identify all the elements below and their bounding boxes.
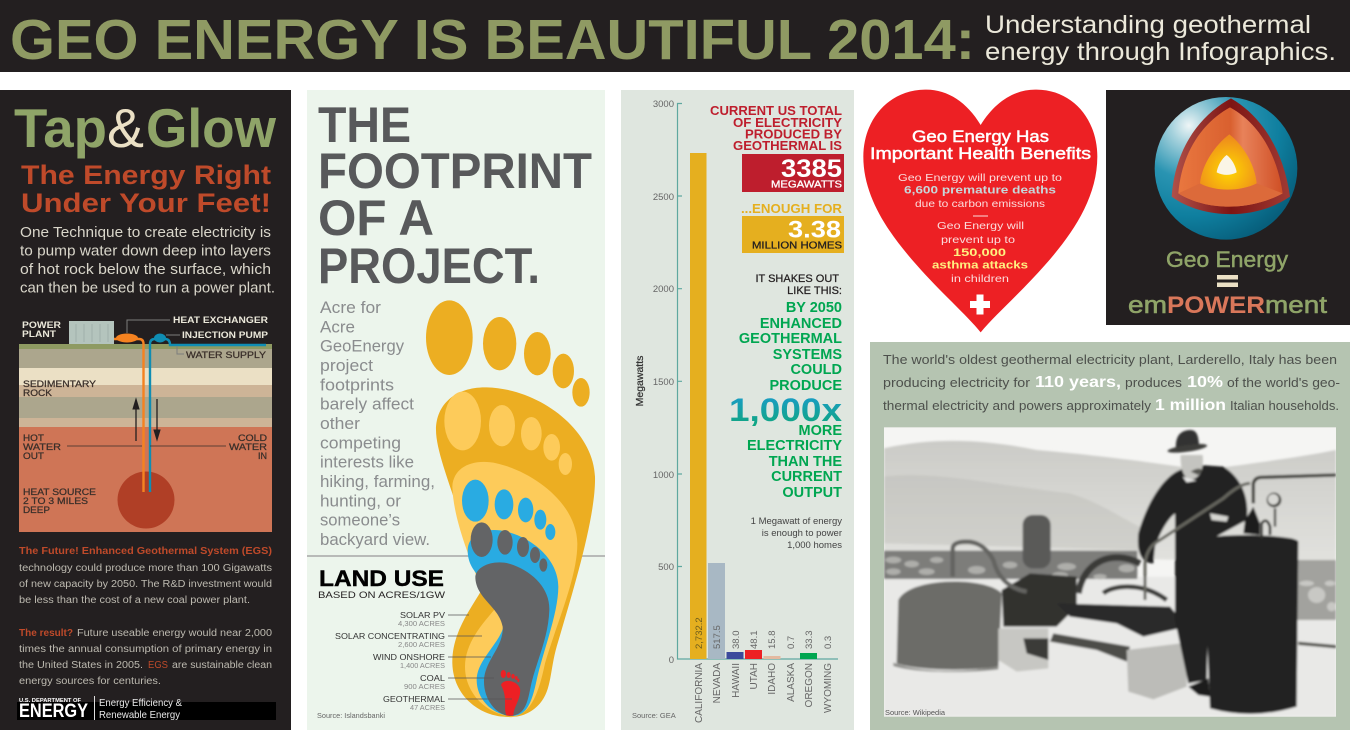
text: by 2050: GEOTHERMAL <box>739 331 842 347</box>
note <box>751 516 842 551</box>
logo: Tap&Glow: Glow <box>146 97 276 159</box>
diagram: geothermal system: DEEP <box>23 505 50 515</box>
text: Larderello: of the world's geo- <box>1227 376 1340 390</box>
bar values: 517.5 <box>712 625 723 649</box>
diagram: geothermal system: HEAT SOURCE <box>23 487 96 497</box>
intro text: to pump water down deep into layers <box>20 244 271 260</box>
intro text: One Technique to create electricity is <box>20 225 271 241</box>
panel: health heart <box>863 90 1097 332</box>
bar chart: megawatts by state <box>634 99 838 723</box>
legend: land use: 1,400 ACRES <box>400 663 445 670</box>
icon: earth cutaway <box>1155 97 1297 240</box>
y axis labels <box>653 99 674 666</box>
note: 1,000 homes <box>787 540 842 551</box>
state labels: HAWAII <box>731 663 742 698</box>
text: future EGS: The Future! Enhanced Geothermal System (EGS) <box>19 546 272 557</box>
text: by 2050: 1,000x <box>729 392 842 428</box>
photo: Larderello geothermal machine <box>884 427 1336 717</box>
diagram: geothermal system: ROCK <box>23 388 52 398</box>
heading: OF A <box>318 190 434 246</box>
icon: heart <box>863 90 1097 332</box>
panel: Tap & Glow <box>0 90 291 730</box>
text: current total: GEOTHERMAL IS <box>733 138 842 153</box>
text: empowerment: em <box>1128 292 1167 319</box>
text: by 2050 <box>729 300 842 501</box>
body text: backyard view. <box>320 531 430 549</box>
heading: The Energy Right <box>21 160 271 190</box>
text: the result: the United States in 2005. <box>19 660 143 671</box>
diagram labels <box>22 315 269 340</box>
intro text: can then be used to run a power plant. <box>20 280 275 296</box>
text: Larderello: 1 million <box>1155 397 1226 414</box>
body text: someone’s <box>320 512 400 530</box>
callout: 3385 megawatts: MEGAWATTS <box>771 178 842 190</box>
heading: Important Health Benefits <box>870 144 1091 163</box>
diagram labels: HEAT EXCHANGER <box>173 315 269 325</box>
state labels: ALASKA <box>786 663 797 702</box>
y axis labels: 1500 <box>653 377 674 388</box>
text: by 2050: SYSTEMS <box>773 347 842 363</box>
logo: Tap&Glow: Tap <box>14 97 107 159</box>
logo: US Department of Energy: ENERGY <box>19 701 88 722</box>
title: GEO ENERGY IS BEAUTIFUL 2014: <box>10 8 975 72</box>
logo: US Department of Energy: Energy Efficiency & <box>99 697 182 709</box>
logo: US Department of Energy: Renewable Energy <box>99 709 181 721</box>
bar values: 0.7 <box>786 636 797 649</box>
heading: land use <box>318 566 445 601</box>
text: by 2050: CURRENT <box>771 469 842 485</box>
body text: hunting, or <box>320 492 402 510</box>
text: it shakes out: LIKE THIS: <box>787 285 842 297</box>
chart: nested footprints <box>426 300 595 717</box>
legend: land use: GEOTHERMAL <box>383 694 445 704</box>
body text: Acre for <box>320 299 382 317</box>
body text: 6,600 premature deaths <box>904 184 1056 196</box>
text: Larderello: 110 years, <box>1035 374 1121 391</box>
heading: land use: BASED ON ACRES/1GW <box>318 590 445 601</box>
y axis labels: 500 <box>658 562 674 573</box>
diagram: geothermal system: 2 TO 3 MILES <box>23 496 88 506</box>
body text: hiking, farming, <box>320 473 435 491</box>
diagram: geothermal system: COLD <box>238 433 268 443</box>
text: current total <box>710 103 842 153</box>
state labels <box>694 663 834 723</box>
leaders <box>127 320 184 354</box>
y axis labels: 3000 <box>653 99 674 110</box>
text: the result: EGS <box>148 660 168 671</box>
footprint: solar PV <box>426 300 595 717</box>
text: Larderello: producing electricity for <box>883 376 1030 390</box>
body text: interests like <box>320 454 414 472</box>
text: the result: times the annual consumption of primary energy in <box>19 644 272 655</box>
text: by 2050: BY 2050 <box>786 300 842 316</box>
pipes <box>114 339 266 492</box>
logo: Tap&Glow <box>14 97 276 159</box>
heading <box>318 97 592 294</box>
state labels: OREGON <box>804 663 815 707</box>
body text: Geo Energy will <box>937 220 1024 232</box>
state labels: IDAHO <box>767 663 778 695</box>
text: empowerment <box>1128 292 1327 319</box>
text: by 2050: COULD <box>790 362 842 378</box>
diagram labels: POWER <box>22 320 62 330</box>
text: it shakes out <box>755 273 842 297</box>
state labels: CALIFORNIA <box>694 663 705 723</box>
text: geo energy: Geo Energy <box>1166 247 1288 272</box>
text: Larderello: produces <box>1125 376 1182 390</box>
note: is enough to power <box>762 528 842 539</box>
text: future EGS: be less than the cost of a new coal power plant. <box>19 595 250 606</box>
note: 1 Megawatt of energy <box>751 516 842 527</box>
header banner <box>0 0 1350 72</box>
text: the result: energy sources for centuries. <box>19 676 161 687</box>
heading: Under Your Feet! <box>21 188 271 218</box>
diagram: geothermal system: IN <box>258 451 267 461</box>
text: by 2050: PRODUCE <box>769 378 842 394</box>
y axis labels: 2000 <box>653 284 674 295</box>
legend: land use <box>335 610 512 712</box>
diagram: geothermal system <box>19 315 272 532</box>
diagram: geothermal system: WATER SUPPLY <box>186 350 266 360</box>
state labels: WYOMING <box>823 663 834 713</box>
heading: FOOTPRINT <box>318 143 592 199</box>
icon: equals <box>1217 275 1238 287</box>
text: Larderello: 10% <box>1187 374 1223 391</box>
state labels: UTAH <box>749 663 760 689</box>
text: current total: CURRENT US TOTAL <box>710 103 842 118</box>
body text <box>898 172 1062 285</box>
subtitle: Understanding geothermal <box>985 11 1311 39</box>
footprint: geothermal <box>501 670 520 716</box>
source: Source: GEA <box>632 711 676 720</box>
heading <box>870 127 1091 163</box>
subtitle: energy through Infographics. <box>985 38 1336 66</box>
y axis labels: 2500 <box>653 192 674 203</box>
bar values: 15.8 <box>767 630 778 649</box>
text: by 2050: ENHANCED <box>760 316 842 332</box>
source: Source: Islandsbanki <box>317 711 385 720</box>
text: current total: OF ELECTRICITY <box>733 115 842 130</box>
footprint: solar concentrating <box>444 392 577 717</box>
heat source <box>118 472 174 528</box>
diagram: geothermal system: WATER <box>23 442 62 452</box>
diagram: geothermal system: OUT <box>23 451 45 461</box>
panel: the footprint of a project <box>307 90 605 730</box>
body text: other <box>320 415 361 433</box>
bars <box>690 153 817 659</box>
source: Source: Wikipedia <box>885 708 946 717</box>
panel: Larderello <box>870 342 1350 730</box>
body text: asthma attacks <box>932 260 1028 272</box>
text: Larderello: Italian households. <box>1230 399 1339 413</box>
text: the result: Future useable energy would near 2,000 <box>77 628 272 639</box>
text: by 2050: THAN THE <box>769 454 842 470</box>
text: by 2050: MORE <box>798 423 842 439</box>
bar values: 48.1 <box>749 630 760 649</box>
legend: land use: SOLAR PV <box>400 610 445 620</box>
body text: 150,000 <box>953 247 1006 259</box>
diagram: geothermal system: WATER <box>229 442 268 452</box>
body text: Geo Energy will prevent up to <box>898 172 1062 184</box>
text: future EGS: technology could produce more than 100 Gigawatts <box>19 563 272 574</box>
diagram: geothermal system: HOT <box>23 433 45 443</box>
text: current total: PRODUCED BY <box>745 126 842 142</box>
footprint: coal <box>471 522 549 716</box>
y axis labels: 0 <box>669 655 674 666</box>
diagram labels: PLANT <box>22 329 57 339</box>
text: Larderello <box>883 353 1340 414</box>
panel: empowerment <box>1106 90 1350 325</box>
text: future EGS <box>19 546 272 606</box>
body text: GeoEnergy <box>320 338 405 356</box>
heading: land use: LAND USE <box>319 566 444 591</box>
text: Larderello: thermal electricity and powers approximately <box>883 399 1152 413</box>
legend: land use: WIND ONSHORE <box>373 652 445 662</box>
legend: land use: SOLAR CONCENTRATING <box>335 631 445 641</box>
bar values <box>694 617 834 649</box>
bar values: 38.0 <box>731 630 742 649</box>
logo: US Department of Energy <box>17 696 276 722</box>
legend: land use: 900 ACRES <box>404 684 445 691</box>
arrows <box>133 399 160 441</box>
subtitle <box>985 11 1336 66</box>
text: by 2050: OUTPUT <box>782 485 842 501</box>
text: empowerment: POWER <box>1167 292 1265 319</box>
body text: due to carbon emissions <box>915 198 1045 210</box>
body text: Acre <box>320 318 355 336</box>
panel: megawatts chart <box>621 90 854 730</box>
intro text <box>20 225 275 296</box>
body text: in children <box>951 273 1009 285</box>
heading <box>21 160 271 218</box>
legend: land use: 4,300 ACRES <box>398 621 445 628</box>
body text: barely affect <box>320 396 414 414</box>
text: Larderello: The world's oldest geothermal electricity plant, Larderello, Italy has been <box>883 353 1337 367</box>
body text: competing <box>320 434 401 452</box>
text: future EGS: of new capacity by 2050. The R&D investment would <box>19 579 272 590</box>
body text <box>320 299 435 549</box>
heading: PROJECT. <box>318 238 540 294</box>
callout: 3.38 million homes: MILLION HOMES <box>752 240 842 252</box>
text: by 2050: ELECTRICITY <box>747 438 842 454</box>
y axis title: Megawatts <box>634 356 646 406</box>
text: the result: The result? <box>19 627 73 639</box>
heading: Geo Energy Has <box>912 127 1049 146</box>
footprint: wind onshore <box>462 480 558 716</box>
text: it shakes out: IT SHAKES OUT <box>755 273 839 285</box>
callout: 3.38 million homes: 3.38 <box>788 216 841 244</box>
legend: land use: 47 ACRES <box>410 705 445 712</box>
bar values: 0.3 <box>823 636 834 649</box>
heading: THE <box>318 97 411 153</box>
callout: 3.38 million homes: ...ENOUGH FOR <box>741 201 843 216</box>
text: empowerment: ment <box>1265 292 1327 319</box>
diagram: geothermal system: SEDIMENTARY <box>23 379 96 389</box>
logo: Tap&Glow: & <box>107 97 144 159</box>
icon: medical cross <box>970 294 990 314</box>
y axis labels: 1000 <box>653 470 674 481</box>
body text: footprints <box>320 376 394 394</box>
legend: land use: COAL <box>420 673 445 683</box>
body text: project <box>320 357 373 375</box>
power plant <box>69 321 114 344</box>
bar values: 33.3 <box>804 630 815 649</box>
text: the result: are sustainable clean <box>172 660 272 671</box>
diagram labels: INJECTION PUMP <box>182 330 268 340</box>
legend: land use: 2,600 ACRES <box>398 642 445 649</box>
text: the result <box>19 627 272 687</box>
state labels: NEVADA <box>712 663 723 703</box>
bar values: 2,732.2 <box>694 617 705 649</box>
intro text: of hot rock below the surface, which <box>20 262 271 278</box>
callout: 3.38 million homes <box>741 201 844 253</box>
callout: 3385 megawatts <box>742 154 844 192</box>
callout: 3385 megawatts: 3385 <box>781 155 842 183</box>
logo: US Department of Energy: U.S. DEPARTMENT OF <box>19 698 81 704</box>
body text: prevent up to <box>941 234 1015 246</box>
